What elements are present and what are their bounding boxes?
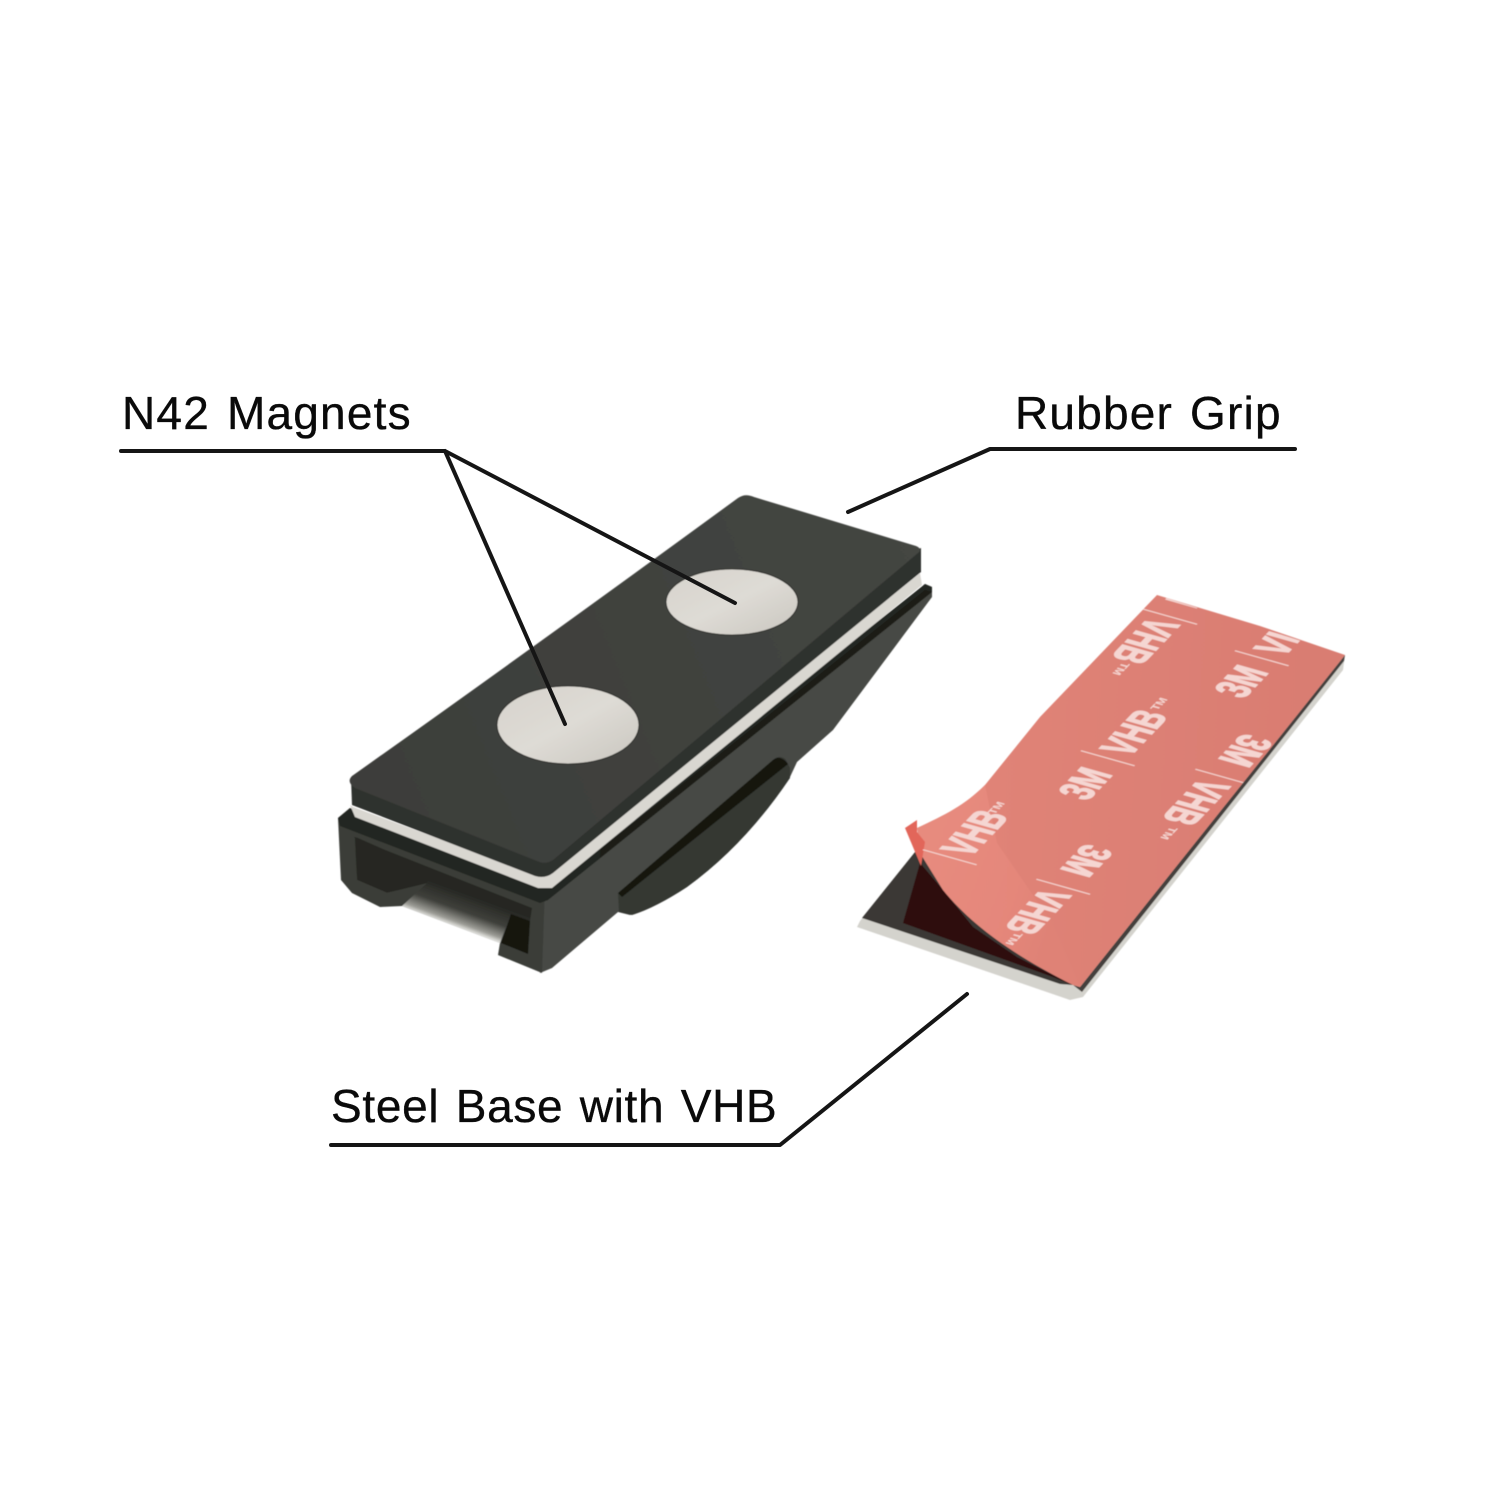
print: flipped 3M VHB lower row: VHB	[995, 885, 1081, 939]
print: 3M VHB upper right row	[1215, 630, 1300, 698]
print: flipped 3M VHB right row: TM	[1157, 826, 1179, 841]
print: flipped 3M VHB lower row: 3M	[1050, 841, 1124, 881]
leader line: rubber grip	[848, 449, 1295, 512]
callout: N42 Magnets	[121, 387, 735, 724]
print: flipped 3M VHB right row	[1160, 734, 1272, 840]
leader line: steel base	[331, 994, 967, 1145]
base top rim	[338, 584, 932, 903]
silver strip	[350, 573, 922, 888]
print: flipped 3M VHB lower row	[1005, 844, 1112, 946]
print: flipped 3M VHB lower row: TM	[1002, 932, 1025, 946]
left slot	[354, 837, 430, 893]
steel black top	[862, 852, 1073, 985]
print: 3M VHB upper right row: VHB	[1244, 605, 1332, 660]
dark adhesive shadow under curl	[903, 863, 1073, 985]
product: magnetic mount	[338, 495, 932, 973]
print: flipped 3M VHB right row: 3M	[1208, 730, 1283, 771]
label: Rubber Grip: Rubber Grip	[1015, 387, 1282, 439]
print: VHB at curl: TM	[986, 801, 1008, 815]
channel opening	[355, 838, 532, 943]
print: 3M VHB middle row: VHB	[1090, 705, 1178, 760]
right slot	[501, 914, 530, 954]
plate side	[351, 548, 921, 877]
side face and wedge	[540, 584, 932, 973]
leader lines: magnets	[121, 451, 735, 724]
side fin	[618, 757, 790, 915]
red liner	[917, 595, 1345, 987]
print: VHB at curl: VHB	[930, 805, 1019, 860]
print: flipped VHB upper left: TM	[1109, 662, 1132, 676]
curled liner corner	[917, 785, 1080, 987]
print: flipped VHB upper left: 3M	[1156, 571, 1231, 612]
callout: Rubber Grip	[848, 387, 1295, 512]
plate top face	[350, 495, 920, 863]
printed tape text	[922, 598, 1300, 946]
label: N42 Magnets: N42 Magnets	[122, 387, 412, 439]
dark tape edge	[1073, 655, 1345, 992]
side groove	[600, 590, 932, 858]
label: Steel Base with VHB: Steel Base with VHB	[331, 1080, 777, 1132]
liner tip	[905, 820, 925, 866]
product: steel base with VHB tape	[857, 571, 1345, 1000]
magnet far	[666, 569, 798, 635]
front face of base	[338, 808, 545, 973]
print: flipped VHB upper left	[1112, 598, 1198, 676]
print: 3M VHB middle row: TM	[1148, 697, 1171, 711]
print: 3M VHB middle row	[1059, 697, 1168, 800]
print: VHB at curl	[922, 801, 1007, 866]
print: 3M VHB upper right row: 3M	[1203, 661, 1279, 702]
print: flipped 3M VHB right row: VHB	[1152, 775, 1240, 830]
callout: Steel Base with VHB	[331, 994, 967, 1145]
magnet near	[497, 686, 639, 764]
print: 3M VHB middle row: 3M	[1047, 763, 1122, 804]
steel edge	[857, 655, 1345, 1000]
print: flipped VHB upper left: VHB	[1101, 614, 1190, 669]
